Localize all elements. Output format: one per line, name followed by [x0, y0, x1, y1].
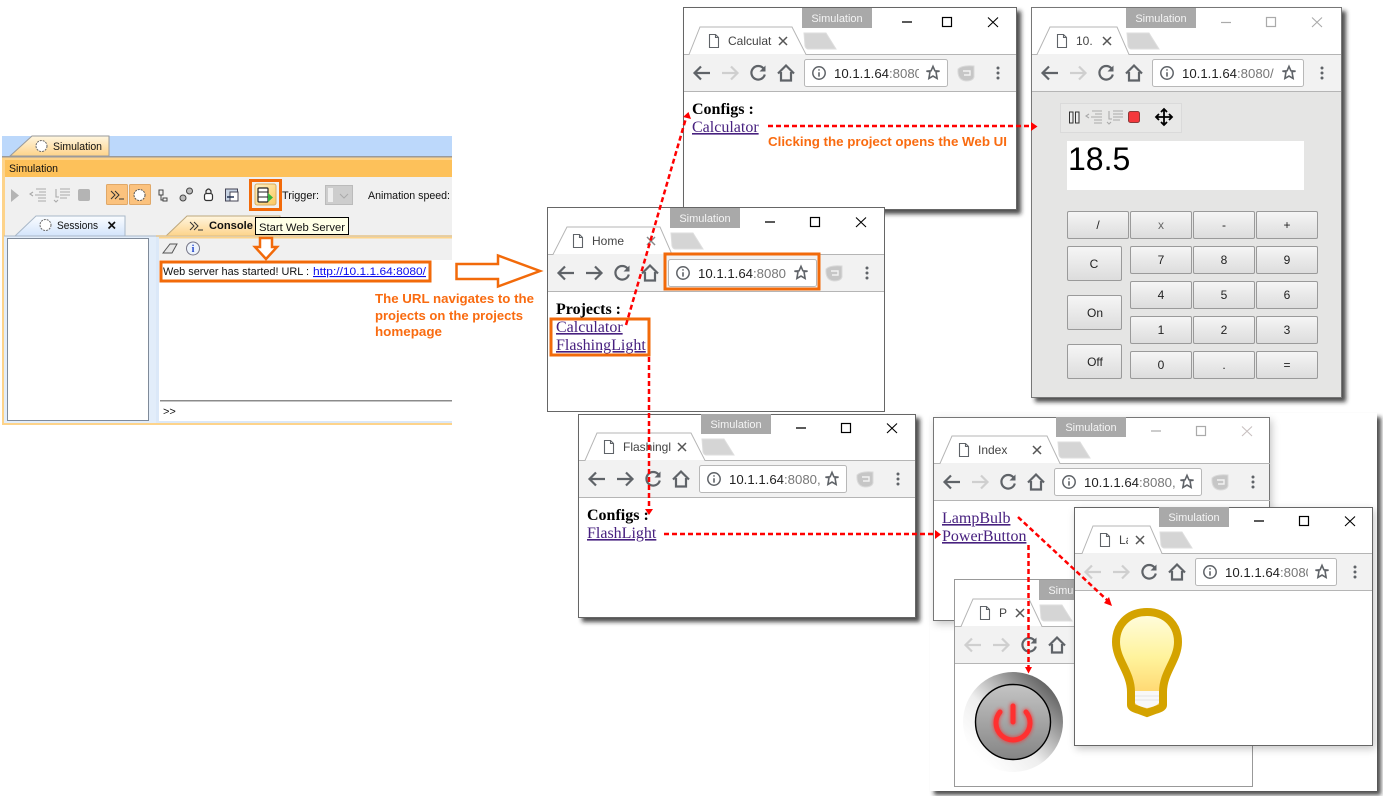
- calculator keypad: x: [1158, 218, 1164, 232]
- icon: power button: [963, 672, 1063, 772]
- arrow: down to console message: [255, 238, 277, 259]
- calculator keypad: 4: [1158, 288, 1165, 302]
- calculator keypad: 8: [1221, 253, 1228, 267]
- calculator keypad: /: [1096, 218, 1100, 232]
- arrow: console to browser: [456, 256, 540, 286]
- window: Home projects: Calculator: [556, 319, 623, 336]
- arrow: LampBulb to bulb: [1018, 517, 1112, 606]
- tab: Simulation: [10, 136, 109, 156]
- tooltip: Start Web Server: Start Web Server: [259, 222, 345, 234]
- window: LampBulb: La: [1119, 533, 1133, 547]
- calculator keypad: 1: [1158, 323, 1165, 337]
- callout: URL navigates: [375, 292, 534, 339]
- calculator keypad: 5: [1221, 288, 1228, 302]
- window: FlashingLight configs: FlashLight: [587, 525, 657, 542]
- panel: Console: >>: [163, 406, 176, 418]
- calculator keypad: -: [1222, 218, 1226, 232]
- window: LampBulb: Simulation: [1168, 512, 1220, 524]
- window: Home projects: 10.1.1.64:8080: [698, 266, 786, 281]
- calculator display: 18.5: [1068, 141, 1130, 177]
- window: Calculator configs: Configs :: [692, 101, 754, 118]
- window: Calculator web UI: 10.: [1076, 34, 1093, 48]
- window: Calculator configs: Simulation: [811, 13, 863, 25]
- calculator keypad: 0: [1158, 358, 1165, 372]
- window: FlashingLight configs: 10.1.1.64:8080,: [729, 472, 821, 487]
- console message: [161, 262, 430, 281]
- window: Calculator web UI: [1032, 8, 1342, 398]
- window: LampBulb: [1074, 507, 1372, 746]
- window: FlashingLight configs: Flashingl: [623, 440, 671, 454]
- window: Index: Index: [978, 443, 1007, 457]
- callout: URL navigates: homepage: [375, 325, 442, 339]
- calculator keypad: Off: [1087, 355, 1104, 369]
- calculator keypad: [1068, 212, 1318, 378]
- window: PowerButton: Po: [999, 606, 1014, 620]
- heading: Simulation title bar: [5, 160, 452, 177]
- calculator keypad: 3: [1284, 323, 1291, 337]
- window: LampBulb: 10.1.1.64:8080: [1225, 565, 1313, 580]
- window: FlashingLight configs: Simulation: [710, 419, 762, 431]
- window: Calculator web UI: 10.1.1.64:8080/: [1182, 66, 1274, 81]
- arrow: FlashingLight link to Configs: [645, 357, 653, 515]
- window: Index: [934, 417, 1270, 620]
- panel: Sessions: [4, 216, 156, 423]
- calculator keypad: 7: [1158, 253, 1165, 267]
- icon: info bubble: [186, 242, 200, 255]
- arrow: Calculator configs to web UI: [768, 122, 1038, 131]
- arrow: FlashLight to Index: [664, 530, 941, 539]
- calculator keypad: 9: [1284, 253, 1291, 267]
- window: Calculator configs: Calculator: [692, 119, 759, 136]
- simulation controls: [1060, 104, 1182, 132]
- icon: info bubble: i: [192, 244, 195, 255]
- callout: URL navigates: The URL navigates to the: [375, 292, 534, 306]
- calculator display: [1067, 141, 1304, 190]
- heading: Simulation title bar: Simulation: [9, 163, 58, 175]
- calculator keypad: .: [1222, 358, 1226, 372]
- window: Home projects: Home: [592, 234, 624, 248]
- icon: light bulb: [1116, 612, 1178, 713]
- icon: start web server: [255, 184, 276, 205]
- window: FlashingLight configs: [578, 414, 916, 618]
- window: Index: PowerButton: [942, 528, 1026, 545]
- console message: Web server has started! URL :: [163, 266, 309, 278]
- calculator keypad: 2: [1221, 323, 1228, 337]
- window: FlashingLight configs: Configs :: [587, 507, 649, 524]
- panel: Console: [156, 216, 452, 423]
- toolbar: [5, 177, 452, 237]
- window: PowerButton: Simulation: [1048, 585, 1100, 597]
- window: Home projects: [548, 208, 884, 412]
- panel: MagicDraw simulation window: [2, 136, 452, 425]
- window: Home projects: Simulation: [679, 213, 731, 225]
- window: Calculator configs: [684, 8, 1016, 210]
- window: Calculator configs: 10.1.1.64:8080: [834, 66, 922, 81]
- highlight: project links: [551, 319, 649, 355]
- icon: eraser: [163, 244, 177, 253]
- highlight: web server button: [250, 180, 280, 210]
- window: Home projects: FlashingLight: [556, 337, 646, 354]
- calculator keypad: +: [1283, 218, 1291, 232]
- callout: opens web UI: Clicking the project opens the Web UI: [768, 135, 1007, 149]
- window: Index: Simulation: [1065, 422, 1117, 434]
- console message: http://10.1.1.64:8080/: [313, 266, 427, 278]
- calculator keypad: =: [1283, 358, 1291, 372]
- tooltip: Start Web Server: [256, 218, 348, 234]
- highlight: address bar: [665, 254, 819, 289]
- calculator keypad: On: [1087, 306, 1103, 320]
- window: Calculator configs: Calculat: [728, 34, 772, 48]
- panel: Console: Console: [209, 220, 253, 232]
- toolbar: Trigger:: [282, 190, 319, 202]
- window: Home projects: Projects :: [556, 301, 621, 318]
- window: Calculator web UI: Simulation: [1135, 13, 1187, 25]
- calculator keypad: C: [1090, 257, 1099, 271]
- toolbar: Animation speed:: [368, 190, 450, 202]
- panel: Sessions: Sessions: [57, 220, 98, 232]
- tab: Simulation: Simulation: [53, 141, 102, 153]
- arrow: Calculator link to Configs: [626, 112, 691, 325]
- calculator keypad: 6: [1284, 288, 1291, 302]
- window: Index: 10.1.1.64:8080,: [1084, 475, 1176, 490]
- window: PowerButton: [954, 580, 1252, 786]
- panel: white backdrop for FlashLight windows: [930, 413, 1377, 791]
- arrow: PowerButton to button: [1025, 545, 1032, 674]
- window: Index: LampBulb: [942, 510, 1010, 527]
- callout: URL navigates: projects on the projects: [375, 309, 523, 323]
